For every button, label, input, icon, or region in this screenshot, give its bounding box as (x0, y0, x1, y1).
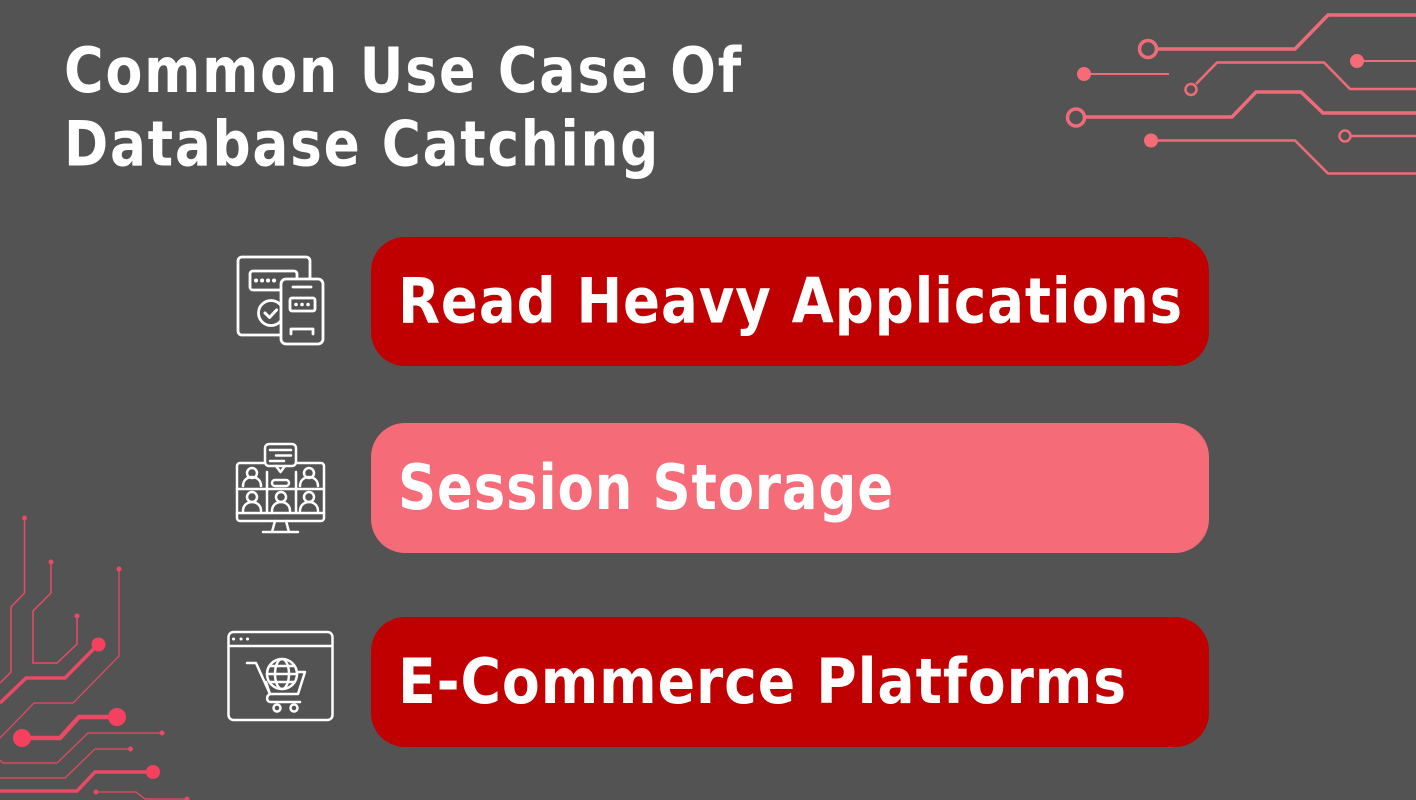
title: Database Catching (64, 108, 660, 180)
icon: online shopping cart (228, 632, 332, 720)
icon: video conference monitor (237, 444, 324, 532)
pill: Session Storage: Session Storage (398, 451, 894, 524)
icon: web and mobile form (238, 257, 323, 344)
pill: E-Commerce Platforms (371, 617, 1209, 747)
pill: Session Storage (371, 423, 1209, 553)
circuit decoration: bottom left (0, 516, 190, 800)
pill: Read Heavy Applications: Read Heavy Applications (398, 264, 1183, 338)
title: Common Use Case Of (64, 34, 743, 107)
pill: Read Heavy Applications (371, 237, 1209, 366)
title (64, 34, 743, 180)
circuit decoration: top right (1068, 15, 1416, 174)
pill: E-Commerce Platforms: E-Commerce Platforms (398, 645, 1127, 718)
